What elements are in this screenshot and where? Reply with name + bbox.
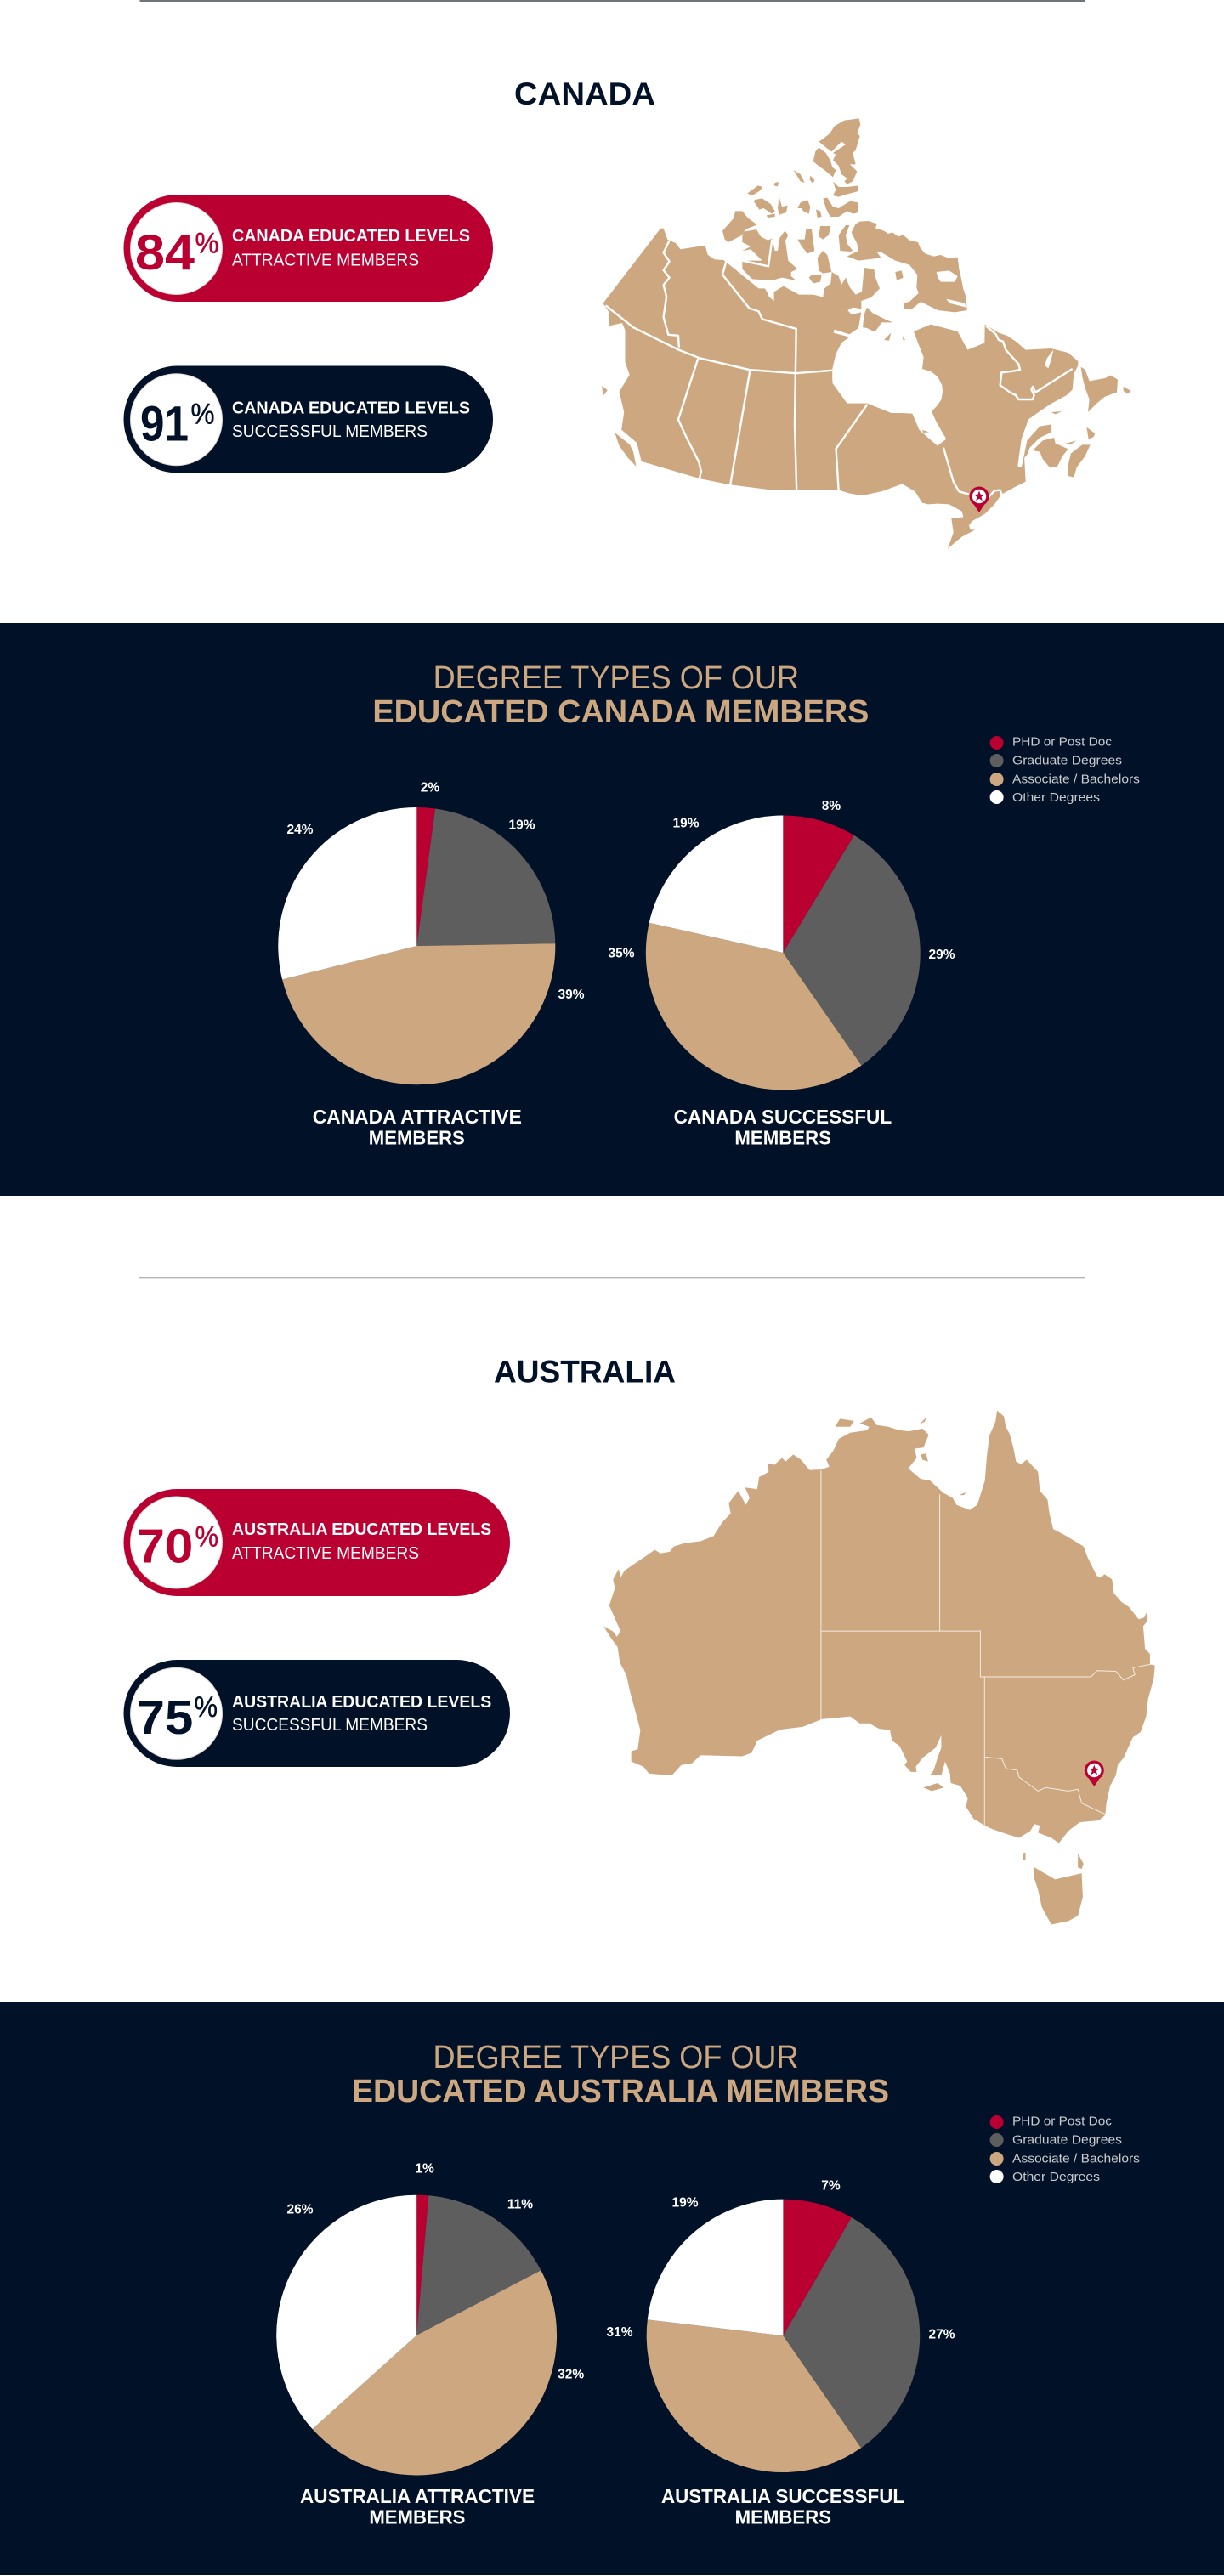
pie chart: Australia successful members: AUSTRALIA SUCCESSFUL <box>661 2485 904 2507</box>
stat pill: 84% attractive members: CANADA EDUCATED LEVELS <box>232 227 470 246</box>
pie chart: Australia attractive members: 26% <box>286 2203 314 2216</box>
legend: degree types: Associate / Bachelors <box>1012 772 1140 787</box>
pie chart: Canada successful members: MEMBERS <box>734 1127 831 1149</box>
legend: degree types: PHD or Post Doc <box>1012 2115 1113 2128</box>
stat pill: 84% attractive members <box>124 195 493 302</box>
legend: degree types: Graduate Degrees <box>1012 2133 1122 2147</box>
pie chart: Australia attractive members: AUSTRALIA ATTRACTIVE <box>300 2485 535 2507</box>
legend: degree types: Associate / Bachelors <box>1012 2152 1140 2166</box>
stat pill: 75% successful members: SUCCESSFUL MEMBERS <box>232 1716 428 1735</box>
pie chart: Canada attractive members: CANADA ATTRACTIVE <box>313 1106 522 1128</box>
legend: degree types: Other Degrees <box>1012 790 1100 805</box>
stat pill: 84% attractive members: % <box>196 228 219 260</box>
pie chart: Canada attractive members: 39% <box>558 988 585 1002</box>
stat pill: 84% attractive members: ATTRACTIVE MEMBERS <box>232 251 419 269</box>
section: Canada overview <box>124 76 1131 549</box>
pie chart: Australia successful members: MEMBERS <box>735 2505 831 2528</box>
heading: degree types of our educated Australia members: EDUCATED AUSTRALIA MEMBERS <box>352 2074 889 2109</box>
heading: Australia: AUSTRALIA <box>494 1355 676 1390</box>
legend: degree types: Other Degrees <box>1012 2170 1100 2184</box>
stat pill: 91% successful members: % <box>190 399 214 431</box>
stat pill: 75% successful members: % <box>194 1691 218 1724</box>
pie chart: Australia attractive members: MEMBERS <box>369 2505 465 2528</box>
heading: degree types of our educated Canada members: DEGREE TYPES OF OUR <box>434 660 799 696</box>
stat pill: 75% successful members: 75 <box>137 1690 193 1745</box>
stat pill: 70% attractive members <box>124 1489 510 1596</box>
stat pill: 91% successful members: 91 <box>140 397 189 452</box>
stat pill: 70% attractive members: % <box>196 1520 218 1553</box>
legend: degree types: Graduate Degrees <box>1012 753 1122 768</box>
panel: Canada degree types <box>0 623 1224 1196</box>
pie chart: Australia attractive members <box>276 2162 584 2528</box>
pie chart: Canada attractive members <box>278 780 585 1149</box>
heading: degree types of our educated Australia members: DEGREE TYPES OF OUR <box>434 2040 799 2075</box>
legend: degree types <box>990 2115 1140 2184</box>
pie chart: Canada successful members: CANADA SUCCESSFUL <box>674 1106 892 1128</box>
pie chart: Canada successful members: 35% <box>608 946 635 960</box>
pie chart: Australia successful members: 7% <box>821 2179 841 2193</box>
map: Australia with states <box>604 1411 1155 1924</box>
pie chart: Australia successful members <box>606 2179 955 2528</box>
pie chart: Canada attractive members: 2% <box>421 780 439 795</box>
stat pill: 70% attractive members: ATTRACTIVE MEMBERS <box>232 1544 419 1563</box>
map: Canada with provinces <box>602 118 1131 549</box>
stat pill: 70% attractive members: AUSTRALIA EDUCATED LEVELS <box>232 1520 491 1539</box>
pie chart: Canada successful members <box>608 799 955 1149</box>
icon: Australia location pin <box>1085 1761 1104 1786</box>
stat pill: 84% attractive members: 84 <box>135 225 195 280</box>
icon: Canada location pin <box>969 486 989 512</box>
heading: degree types of our educated Canada members <box>372 660 869 730</box>
heading: degree types of our educated Australia members <box>352 2040 889 2109</box>
legend: degree types: PHD or Post Doc <box>1012 734 1113 750</box>
pie chart: Australia successful members: 27% <box>928 2327 955 2342</box>
pie chart: Canada attractive members: MEMBERS <box>369 1127 465 1149</box>
pie chart: Canada attractive members: 24% <box>286 823 314 837</box>
pie chart: Australia successful members: 19% <box>672 2196 699 2210</box>
pie chart: Canada successful members: 19% <box>672 816 700 830</box>
stat pill: 91% successful members: SUCCESSFUL MEMBERS <box>232 422 428 441</box>
pie chart: Australia attractive members: 11% <box>507 2198 533 2211</box>
section: Australia overview <box>124 1355 1155 1924</box>
pie chart: Australia attractive members: 1% <box>415 2162 434 2176</box>
stat pill: 70% attractive members: 70 <box>137 1520 193 1574</box>
pie chart: Canada attractive members: 19% <box>508 818 536 833</box>
pie chart: Australia attractive members: 32% <box>558 2368 584 2381</box>
stat pill: 91% successful members: CANADA EDUCATED LEVELS <box>232 399 470 418</box>
stat pill: 75% successful members <box>124 1660 510 1767</box>
stat pill: 91% successful members <box>124 365 493 473</box>
panel: Australia degree types <box>0 2002 1224 2575</box>
heading: Canada: CANADA <box>514 76 655 111</box>
pie chart: Canada successful members: 29% <box>928 948 955 962</box>
pie chart: Canada successful members: 8% <box>822 799 841 813</box>
stat pill: 75% successful members: AUSTRALIA EDUCATED LEVELS <box>232 1693 491 1712</box>
pie chart: Australia successful members: 31% <box>606 2325 633 2340</box>
heading: degree types of our educated Canada members: EDUCATED CANADA MEMBERS <box>372 694 869 730</box>
legend: degree types <box>990 734 1140 805</box>
